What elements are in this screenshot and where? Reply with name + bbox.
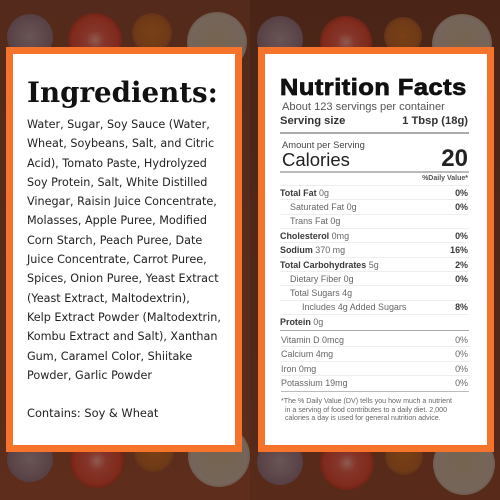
ingredients text block: Wheat, Soybeans, Salt, and Citric bbox=[27, 137, 214, 150]
vitamins and minerals: 0% bbox=[455, 335, 468, 345]
daily value table: 0% bbox=[455, 231, 468, 241]
daily value table: 0% bbox=[455, 274, 468, 284]
serving size bbox=[280, 115, 468, 127]
ingredients text block: Kombu Extract and Salt), Xanthan bbox=[27, 330, 217, 343]
daily value table: 0% bbox=[455, 202, 468, 212]
vitamins and minerals: 0% bbox=[455, 378, 468, 388]
daily value table: Total Sugars 4g bbox=[290, 288, 352, 298]
footnote bbox=[281, 397, 452, 422]
ingredients text block: Water, Sugar, Soy Sauce (Water, bbox=[27, 118, 210, 131]
amount per serving: Amount per Serving bbox=[282, 139, 365, 150]
ingredients text block: Kelp Extract Powder (Maltodextrin, bbox=[27, 311, 221, 324]
daily value table: 16% bbox=[450, 245, 468, 255]
ingredients text block: Acid), Tomato Paste, Hydrolyzed bbox=[27, 157, 207, 170]
calories: 20 bbox=[441, 145, 468, 172]
ingredients text block: Soy Protein, Salt, White Distilled bbox=[27, 176, 207, 189]
ingredients text block: Spices, Onion Puree, Yeast Extract bbox=[27, 272, 219, 285]
daily value table: Total Fat 0g bbox=[280, 188, 329, 198]
vitamins and minerals: Iron 0mg bbox=[281, 364, 316, 374]
ingredients text block bbox=[26, 118, 221, 382]
daily value table: Dietary Fiber 0g bbox=[290, 274, 354, 284]
daily value table: 2% bbox=[455, 260, 468, 270]
daily value table: 8% bbox=[455, 302, 468, 312]
ingredients text block: Molasses, Apple Puree, Modified bbox=[27, 214, 207, 227]
daily value table: %Daily Value* bbox=[422, 175, 468, 182]
daily value table: 0% bbox=[455, 188, 468, 198]
calories bbox=[282, 145, 468, 172]
ingredients text block: Powder, Garlic Powder bbox=[27, 369, 152, 382]
panel: ingredients bbox=[6, 47, 242, 452]
daily value table: Total Carbohydrates 5g bbox=[280, 260, 379, 270]
allergen statement: Contains: Soy & Wheat bbox=[27, 406, 158, 420]
serving size: Serving size bbox=[280, 115, 345, 127]
footnote: calories a day is used for general nutrition advice. bbox=[285, 414, 441, 422]
ingredients text block: (Yeast Extract, Maltodextrin), bbox=[27, 292, 190, 305]
heading: Nutrition Facts: Nutrition Facts bbox=[280, 74, 467, 100]
daily value table: Protein 0g bbox=[280, 317, 323, 327]
daily value table: Saturated Fat 0g bbox=[290, 202, 357, 212]
heading: Ingredients: Ingredients: bbox=[27, 76, 218, 109]
vitamins and minerals bbox=[281, 335, 470, 388]
daily value table: Sodium 370 mg bbox=[280, 245, 345, 255]
footnote: *The % Daily Value (DV) tells you how much a nutrient bbox=[281, 397, 452, 405]
footnote: in a serving of food contributes to a daily diet. 2,000 bbox=[285, 406, 447, 414]
vitamins and minerals: Potassium 19mg bbox=[281, 378, 348, 388]
ingredients text block: Vinegar, Raisin Juice Concentrate, bbox=[27, 195, 217, 208]
daily value table: Cholesterol 0mg bbox=[280, 231, 349, 241]
ingredients text block: Gum, Caramel Color, Shiitake bbox=[27, 350, 192, 363]
vitamins and minerals: 0% bbox=[455, 364, 468, 374]
serving size: 1 Tbsp (18g) bbox=[402, 115, 468, 127]
ingredients text block: Corn Starch, Peach Puree, Date bbox=[27, 234, 202, 247]
vitamins and minerals: Calcium 4mg bbox=[281, 349, 333, 359]
daily value table bbox=[280, 174, 469, 327]
vitamins and minerals: 0% bbox=[455, 349, 468, 359]
vitamins and minerals: Vitamin D 0mcg bbox=[281, 335, 344, 345]
calories: Calories bbox=[282, 149, 350, 170]
daily value table: Trans Fat 0g bbox=[290, 216, 340, 226]
daily value table: Includes 4g Added Sugars bbox=[302, 302, 406, 312]
servings per container: About 123 servings per container bbox=[282, 101, 445, 113]
ingredients text block: Juice Concentrate, Carrot Puree, bbox=[27, 253, 207, 266]
panel: nutrition facts bbox=[258, 47, 494, 452]
